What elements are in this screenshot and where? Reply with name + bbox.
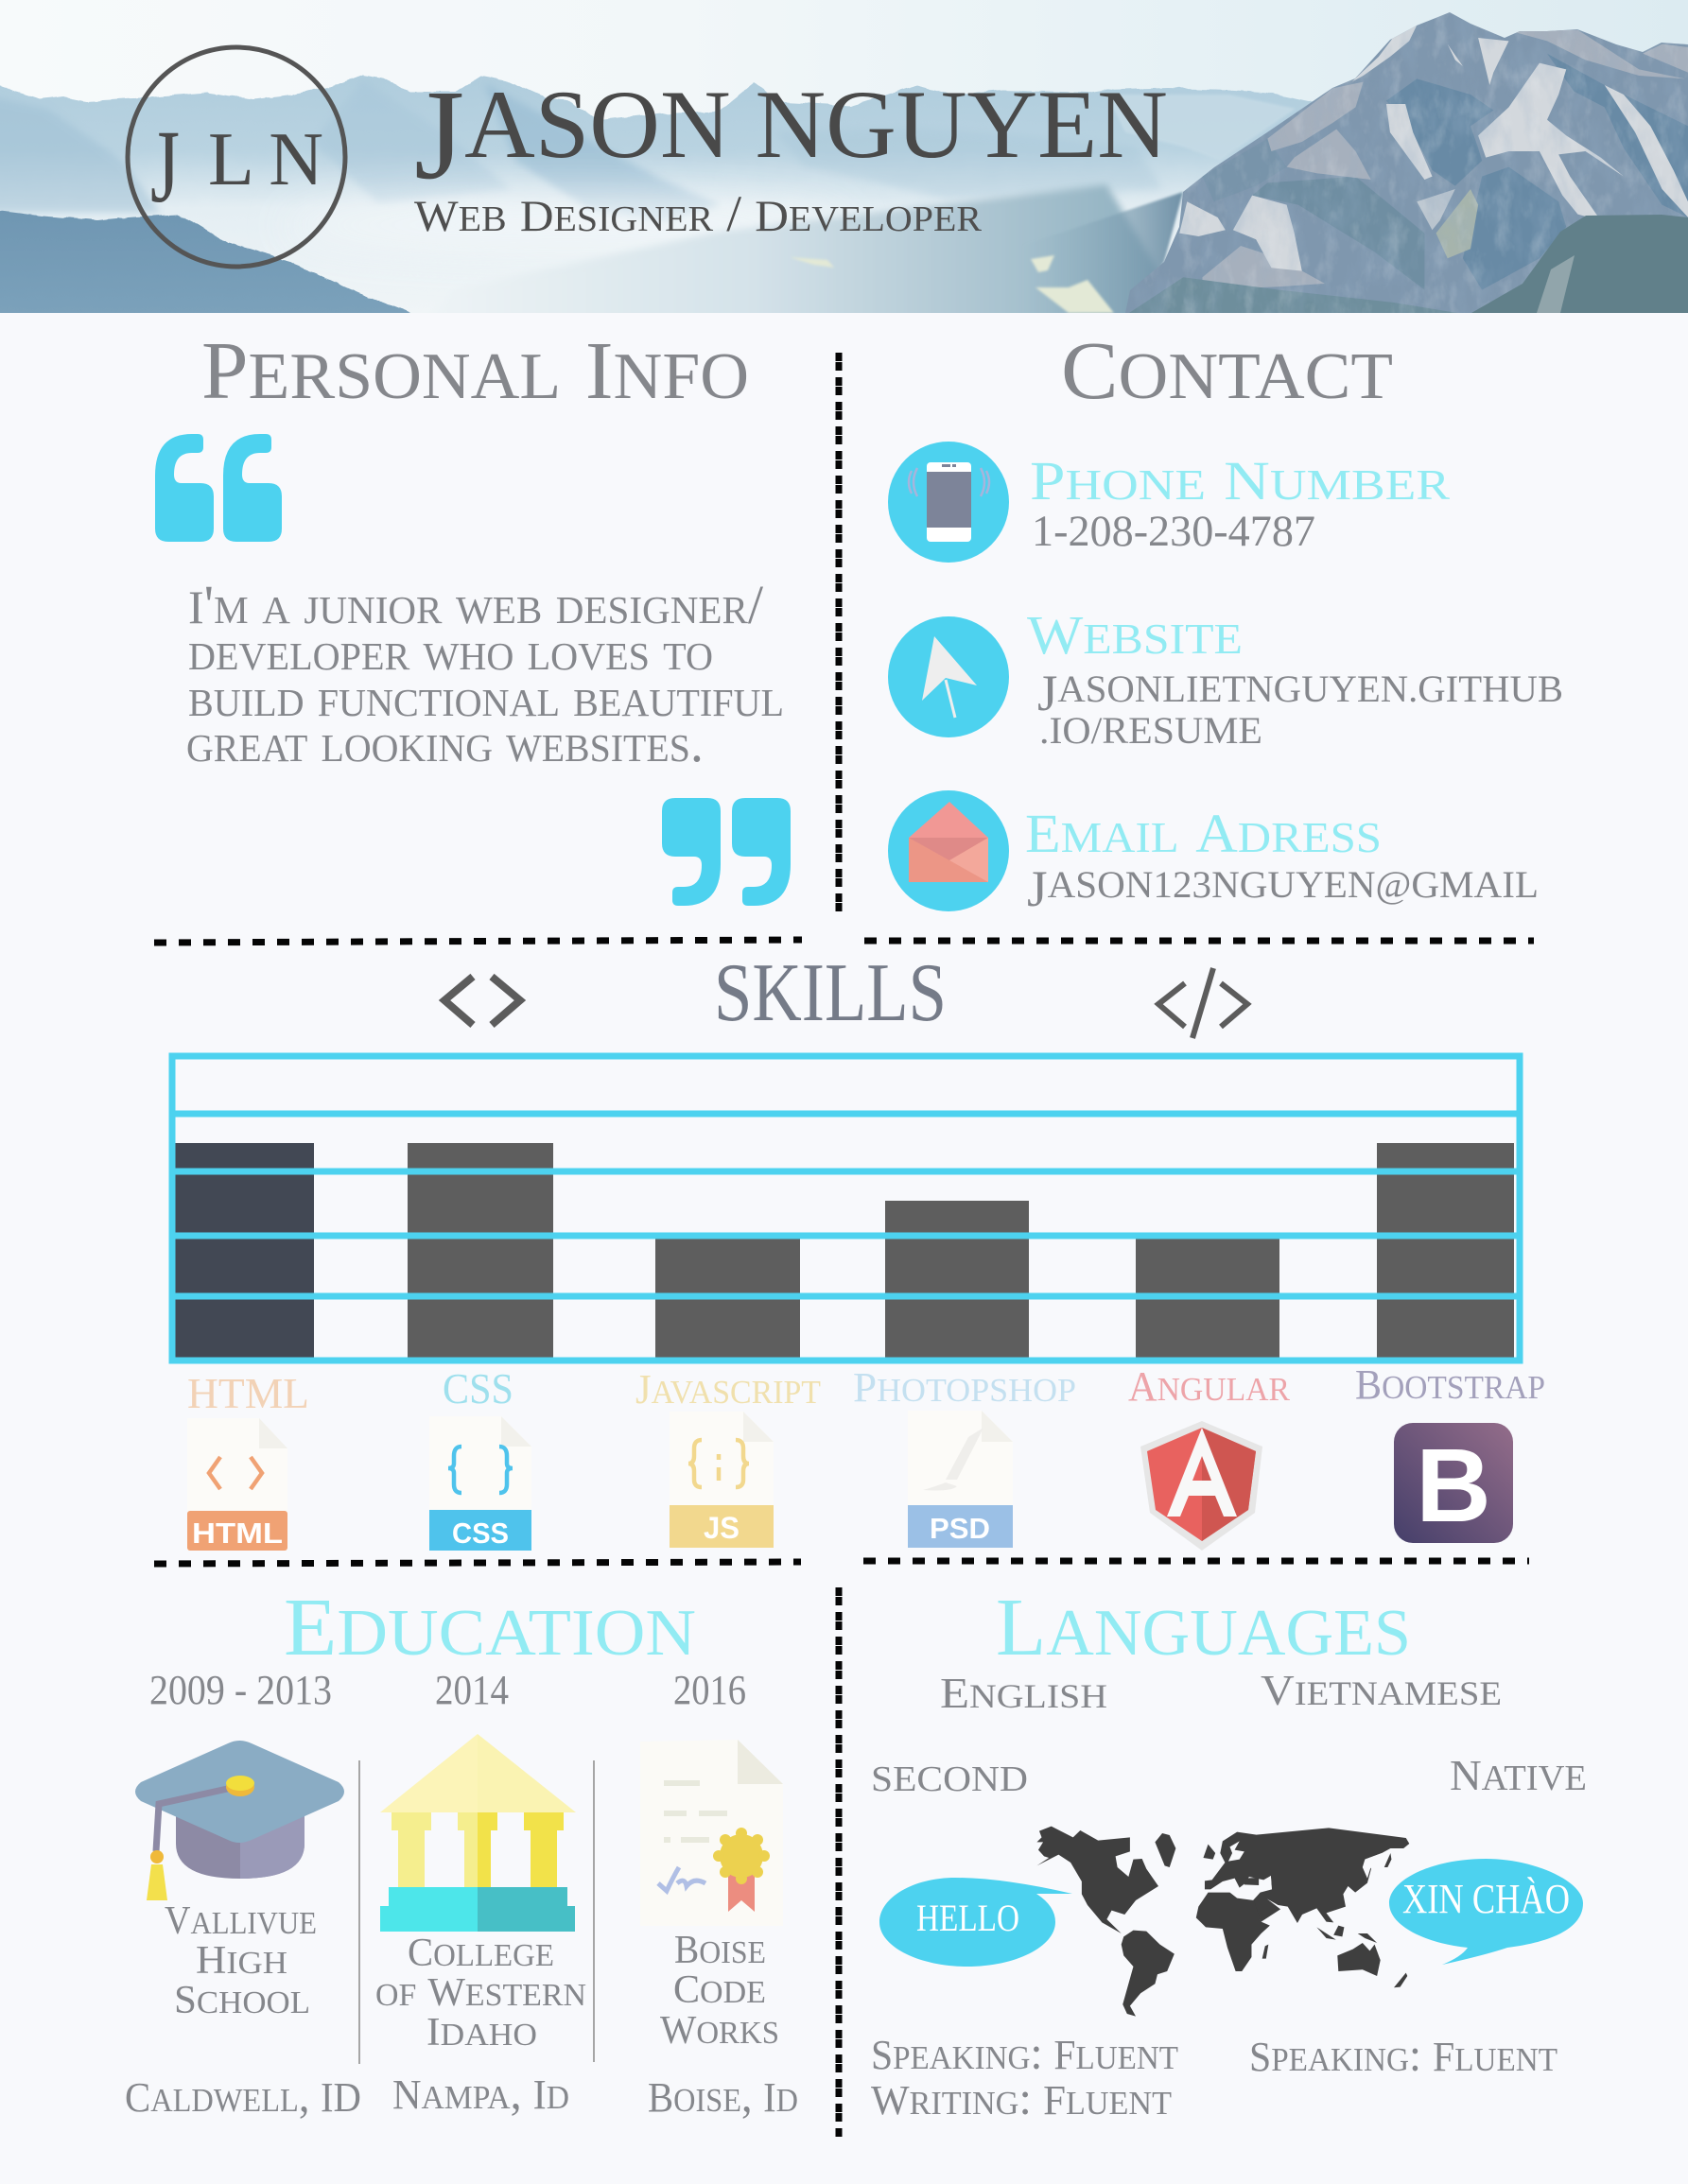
icon: HTML file	[187, 1418, 287, 1551]
website value: ASONLIETNGUYEN.GITHUB	[1057, 667, 1563, 710]
icon: Bootstrap: B	[1416, 1428, 1491, 1544]
language levels	[871, 1744, 1587, 1802]
logo monogram: J	[150, 109, 180, 224]
school name: College of Western Idaho: of Western	[375, 1966, 586, 2016]
fluency: English: Speaking: Fluent	[871, 2026, 1178, 2079]
language names: English	[940, 1665, 1107, 1719]
school locations	[125, 2066, 798, 2122]
heading: education: Education	[284, 1570, 696, 1675]
speech bubble: hello	[879, 1878, 1072, 1967]
world map	[1036, 1827, 1409, 2017]
icon: PSD file: PSD	[930, 1512, 990, 1545]
phone value: 1-208-230-4787	[1032, 507, 1315, 556]
heading: personal info: Personal Info	[201, 314, 749, 419]
icon: CSS file	[429, 1416, 531, 1551]
icon: code slash	[1158, 968, 1247, 1038]
icon: JS file: JS	[704, 1511, 740, 1545]
school locations: Boise, Id	[648, 2069, 798, 2122]
logo monogram	[128, 47, 345, 267]
skill labels: Bootstrap	[1355, 1356, 1545, 1409]
panel: languages	[871, 1570, 1587, 2124]
bar: Photoshop	[885, 1201, 1029, 1358]
label: website: Website	[1027, 598, 1243, 667]
title: name: J	[414, 64, 464, 206]
skill labels: Photopshop	[853, 1359, 1076, 1412]
school name: College of Western Idaho	[375, 1926, 586, 2055]
icon: email envelope	[888, 790, 1009, 911]
icon: CSS file: CSS	[452, 1517, 509, 1550]
icon: phone	[888, 442, 1009, 563]
school name: Boise Code Works: Boise	[674, 1923, 766, 1973]
icon: JS file	[670, 1412, 774, 1548]
label: phone number: Phone Number	[1030, 444, 1450, 513]
school name: College of Western Idaho: Idaho	[426, 2005, 537, 2055]
panel: personal info	[155, 314, 791, 906]
icon: Bootstrap	[1394, 1423, 1513, 1544]
school name: Vallivue: High	[196, 1933, 287, 1984]
icon: angle brackets	[444, 977, 520, 1025]
text block: bio: developer who loves to	[188, 620, 713, 682]
panel: education	[125, 1570, 798, 2122]
website value: J	[1037, 665, 1057, 721]
school name: Boise Code Works: Works	[660, 2003, 779, 2054]
fluency: English: Writing: Fluent	[871, 2071, 1172, 2124]
years: 2016	[673, 1667, 746, 1713]
icon: certificate	[640, 1740, 783, 1926]
language names: Vietnamese	[1261, 1662, 1502, 1716]
icon: closing quote	[662, 798, 791, 906]
skill labels: Javascript	[635, 1361, 821, 1413]
icon: Angular	[1140, 1421, 1262, 1551]
heading: contact: Contact	[1061, 314, 1393, 419]
website value	[1037, 665, 1563, 752]
text block: bio	[186, 574, 784, 773]
language names	[940, 1662, 1502, 1719]
label: email address: Email Adress	[1025, 797, 1382, 866]
skill labels: CSS	[443, 1364, 513, 1413]
bar chart: skills	[170, 1056, 1520, 1361]
icon: cursor	[888, 616, 1009, 737]
speech bubble: xin chao: XIN CHÀO	[1402, 1876, 1570, 1922]
icon: opening quote	[155, 434, 282, 542]
icon: graduation cap	[135, 1741, 344, 1900]
heading: skills: SKILLS	[714, 947, 947, 1039]
title: name: ASON NGUYEN	[464, 71, 1168, 179]
icon: college building	[380, 1734, 576, 1932]
speech bubble: xin chao	[1389, 1859, 1583, 1965]
bar: CSS	[408, 1143, 553, 1358]
school locations: Nampa, Id	[392, 2066, 569, 2119]
email value: J	[1027, 860, 1048, 917]
speech bubble: hello: HELLO	[916, 1897, 1019, 1939]
school name: Vallivue: School	[174, 1973, 310, 2023]
school name: Boise Code Works: Code	[673, 1963, 766, 2013]
text block: bio: build functional beautiful	[188, 667, 784, 728]
years: 2009 - 2013	[149, 1667, 332, 1713]
bar: HTML	[175, 1143, 314, 1358]
school name: Vallivue	[165, 1894, 317, 2023]
years: 2014	[435, 1667, 509, 1713]
skill labels	[187, 1356, 1545, 1417]
language levels: second	[871, 1745, 1028, 1802]
bar: Angular	[1136, 1238, 1279, 1358]
header banner: mountain photo	[0, 0, 1688, 340]
school name: Boise Code Works	[660, 1923, 779, 2054]
skill labels: Angular	[1128, 1358, 1291, 1411]
school locations: Caldwell, ID	[125, 2069, 361, 2122]
icon: PSD file	[908, 1411, 1013, 1548]
icon: HTML file: HTML	[192, 1517, 283, 1550]
bar: Bootstrap	[1377, 1143, 1514, 1358]
heading: languages: Languages	[996, 1570, 1411, 1675]
school name: College of Western Idaho: College	[408, 1926, 554, 1976]
bar: JavaScript	[655, 1238, 800, 1358]
logo monogram: L N	[208, 118, 323, 201]
school name: Vallivue: Vallivue	[165, 1894, 317, 1944]
fluency: Vietnamese: Speaking: Fluent	[1249, 2028, 1557, 2081]
text block: bio: I'm a junior web designer/	[188, 574, 764, 635]
years	[149, 1667, 746, 1713]
email value: ASON123NGUYEN@GMAIL	[1048, 863, 1539, 906]
subtitle: role: Web Designer / Developer	[414, 185, 983, 242]
panel: contact	[888, 314, 1563, 917]
skill labels: HTML	[187, 1369, 309, 1417]
fluency: English	[871, 2026, 1178, 2124]
language levels: Native	[1450, 1744, 1587, 1801]
text block: bio: great looking websites.	[186, 712, 704, 773]
website value: .IO/RESUME	[1039, 709, 1262, 752]
